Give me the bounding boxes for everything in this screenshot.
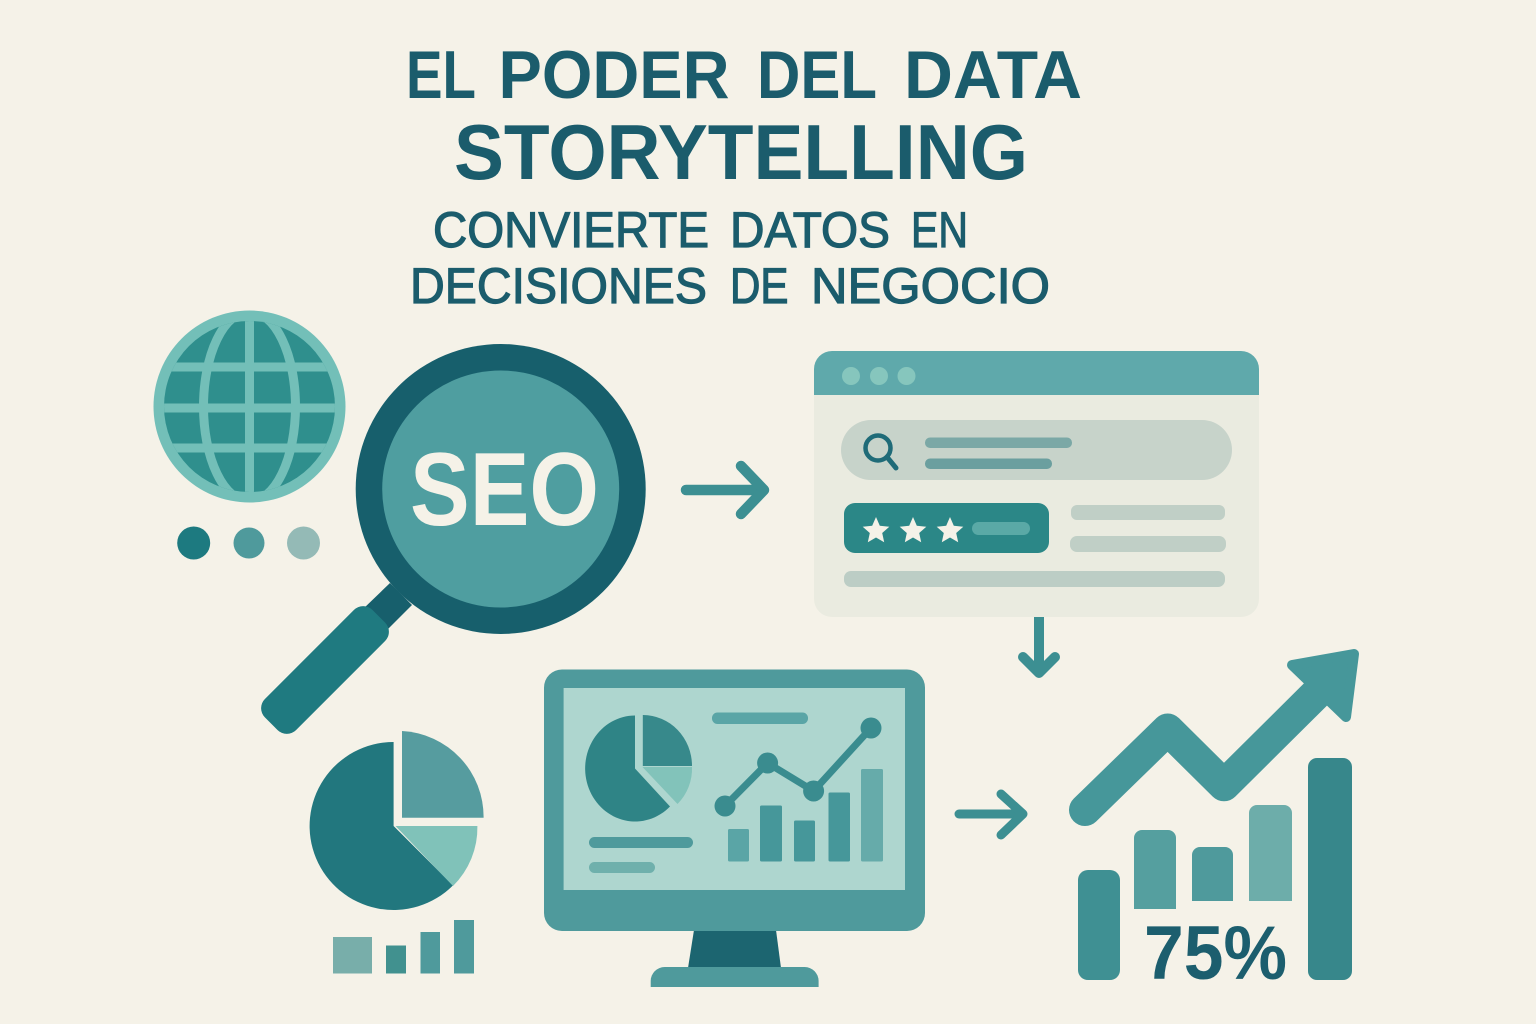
subtitle: DE [730, 258, 788, 314]
icon: SEO magnifying glass [256, 344, 646, 739]
subtitle: EN [911, 202, 968, 258]
icon: SEO magnifying glass: SEO [410, 432, 599, 548]
browser title bar [814, 351, 1259, 395]
dashboard pie chart [585, 715, 692, 821]
title [406, 37, 1082, 196]
icon: globe [150, 310, 350, 502]
dashboard text lines [589, 712, 808, 873]
search bar [841, 420, 1232, 480]
result text lines [844, 505, 1226, 587]
infographic canvas [154, 50, 1359, 987]
monitor stand [688, 930, 781, 968]
monitor screen [564, 688, 905, 890]
subtitle: CONVIERTE [433, 202, 709, 258]
statistic: 75%: 75% [1144, 911, 1287, 996]
title: DATA [904, 37, 1082, 113]
icon: pie chart [310, 731, 484, 910]
growth bar chart [1078, 758, 1352, 980]
title: STORYTELLING [454, 108, 1028, 196]
rating result with stars [844, 503, 1049, 553]
subtitle [410, 202, 1050, 314]
panel: browser search results [814, 351, 1259, 617]
subtitle: NEGOCIO [811, 258, 1050, 314]
dashboard line chart [714, 718, 882, 816]
title: DEL [757, 37, 877, 113]
dashboard bar chart [728, 769, 883, 862]
subtitle: DATOS [730, 202, 890, 258]
window dots [842, 367, 916, 385]
icon: dashboard monitor [544, 670, 925, 987]
title: EL [406, 37, 476, 113]
small bar chart [333, 920, 474, 974]
pagination dots [177, 526, 320, 560]
monitor frame [544, 670, 925, 931]
monitor base [651, 967, 819, 987]
title: PODER [498, 37, 730, 113]
arrow: SEO to search results [686, 466, 764, 514]
arrow: results to dashboard [1023, 617, 1055, 673]
arrow: dashboard to growth [959, 794, 1023, 835]
subtitle: DECISIONES [410, 258, 707, 314]
icon: growth arrow [1085, 654, 1354, 810]
